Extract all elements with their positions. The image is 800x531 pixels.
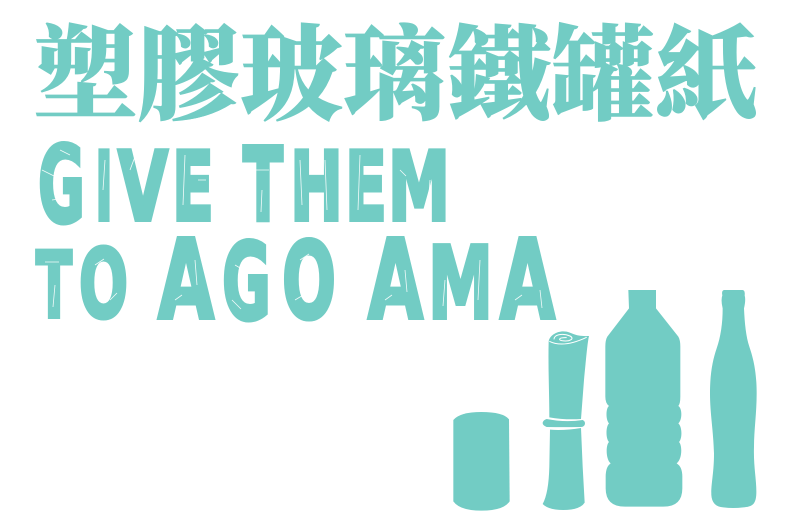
title: Chinese heading: 鐵 — [448, 20, 551, 134]
heading: GIVE THEM: G — [38, 124, 85, 247]
heading: TO AGO AMA: M — [428, 225, 493, 342]
heading: TO AGO AMA: A — [500, 216, 555, 344]
title: Chinese heading: 塑 — [34, 20, 137, 134]
heading: GIVE THEM: T — [243, 126, 283, 245]
heading: TO AGO AMA: A — [158, 216, 214, 344]
title: Chinese heading: 玻 — [240, 20, 343, 134]
icon: can — [453, 412, 510, 511]
title: Chinese heading: 膠 — [137, 20, 240, 134]
title: Chinese heading — [34, 20, 758, 134]
heading: TO AGO AMA: O — [79, 230, 128, 340]
heading: TO AGO AMA: T — [36, 234, 72, 339]
heading: TO AGO AMA: O — [282, 220, 336, 343]
icon: plastic bottle — [605, 290, 682, 507]
heading: GIVE THEM: I — [95, 133, 113, 243]
title: Chinese heading: 璃 — [343, 20, 446, 134]
title: Chinese heading: 紙 — [655, 20, 758, 134]
heading: GIVE THEM — [38, 124, 450, 247]
heading: TO AGO AMA — [36, 216, 555, 344]
icon: glass bottle — [710, 290, 757, 508]
heading: TO AGO AMA: G — [222, 221, 271, 344]
heading: GIVE THEM: V — [118, 133, 168, 243]
heading: GIVE THEM: E — [172, 133, 214, 243]
heading: TO AGO AMA: A — [368, 216, 423, 344]
heading: GIVE THEM: E — [345, 133, 387, 243]
title: Chinese heading: 罐 — [551, 20, 654, 134]
heading: GIVE THEM: M — [388, 133, 450, 243]
heading: GIVE THEM: H — [290, 133, 343, 243]
icon: rolled newspaper — [543, 331, 589, 510]
